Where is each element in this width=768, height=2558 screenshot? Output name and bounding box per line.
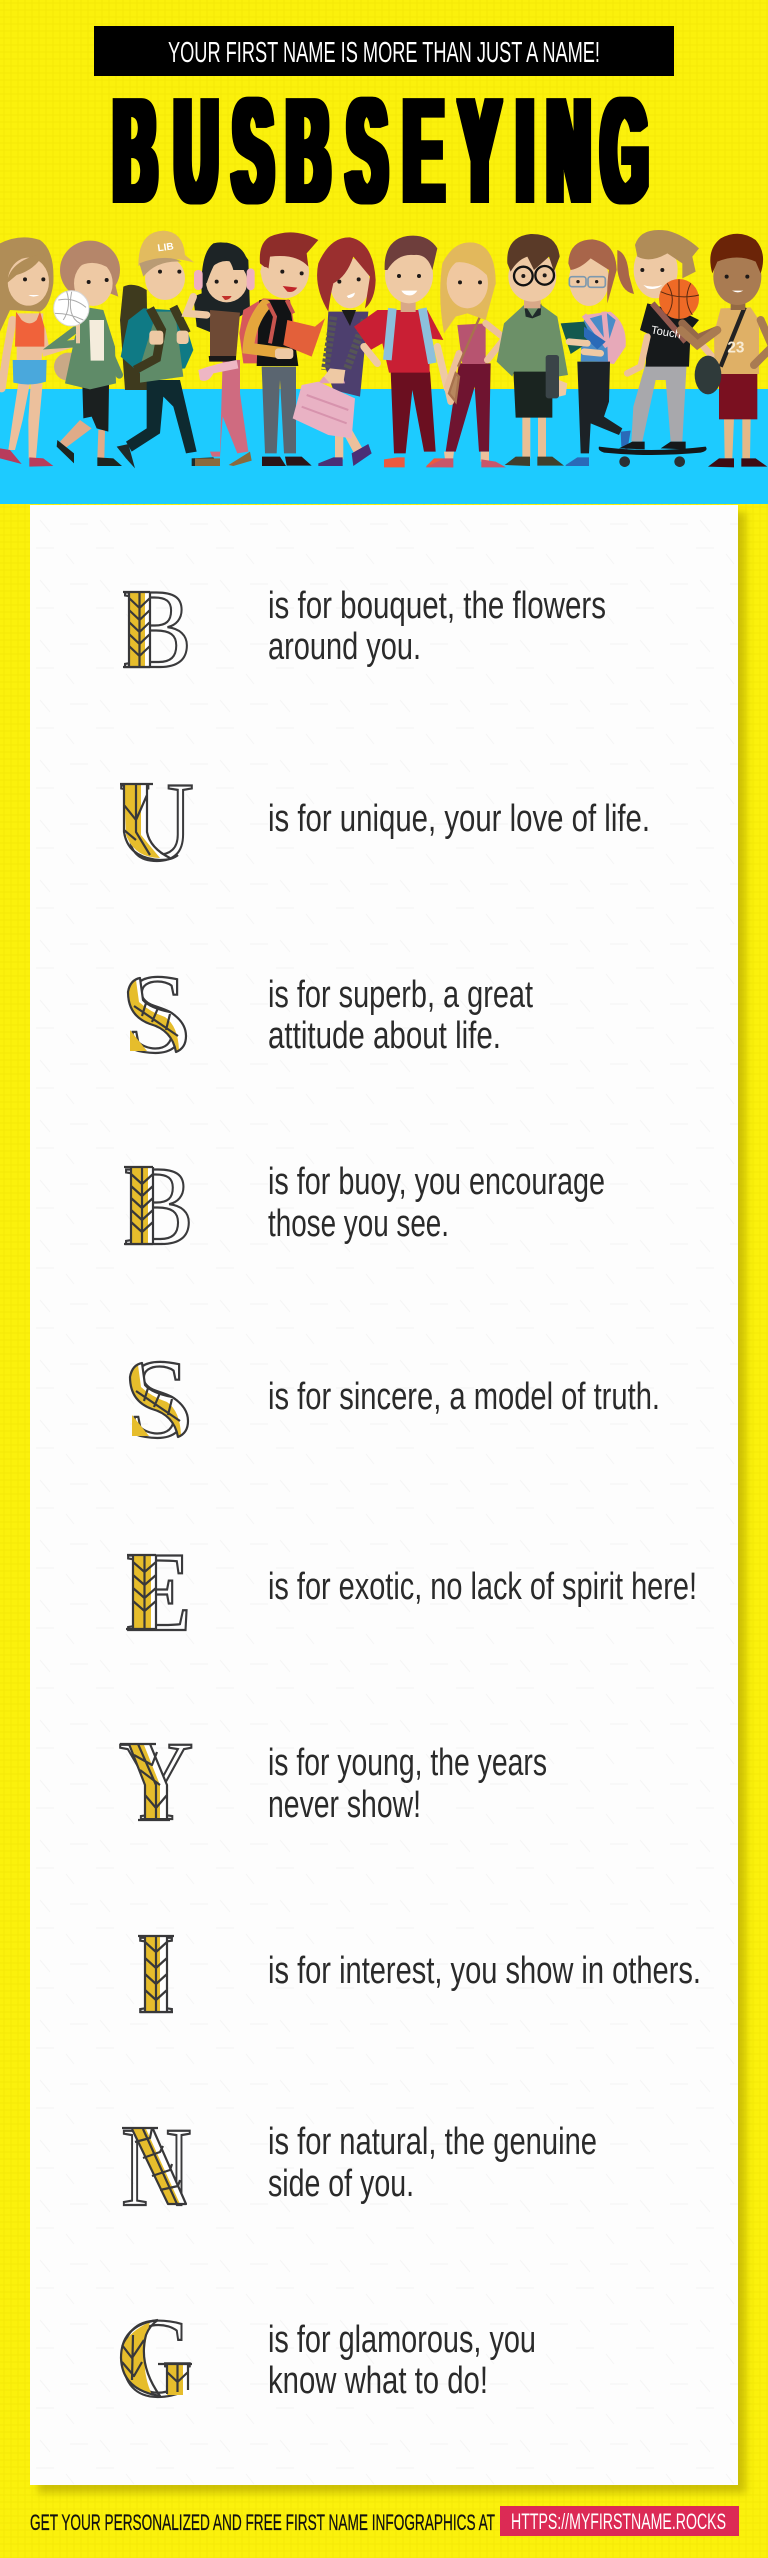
person: boy in yellow tank top: 23 — [727, 340, 744, 357]
text: Y meaning: never show! — [268, 1784, 421, 1826]
person: boy in red shirt — [354, 236, 453, 467]
person: girl in orange top — [0, 237, 78, 467]
illustrated letter G: G — [119, 2296, 193, 2421]
person: skater with basketball — [599, 230, 717, 467]
person: blonde girl — [426, 242, 506, 467]
row 1: letter B — [122, 567, 606, 692]
person: skater with basketball: Touch — [650, 324, 682, 341]
text: N meaning: side of you. — [268, 2163, 414, 2205]
row 5: letter S — [127, 1337, 660, 1462]
text: N meaning: is for natural, the genuine — [268, 2121, 597, 2163]
text: S meaning: is for superb, a great — [268, 974, 533, 1016]
illustrated letter Y: Y — [119, 1719, 194, 1844]
text: G meaning: is for glamorous, you — [268, 2319, 536, 2361]
group of people: left six — [0, 231, 376, 468]
person: boy in yellow tank top — [681, 234, 768, 467]
text: Y meaning: is for young, the years — [268, 1742, 547, 1784]
person: boy with glasses — [497, 234, 568, 466]
row 6: letter E — [125, 1530, 697, 1655]
text: B meaning: those you see. — [268, 1203, 449, 1245]
illustrated letter E: E — [125, 1530, 192, 1655]
person: boy with red book — [239, 232, 325, 466]
person: red-haired girl with pink bag — [293, 237, 376, 466]
row 3: letter S — [125, 952, 533, 1077]
text: B meaning: is for bouquet, the flowers — [268, 585, 606, 627]
person: girl with ponytail and tablet — [561, 239, 634, 466]
row 7: letter Y — [119, 1719, 547, 1844]
footer call to action: GET YOUR PERSONALIZED AND FREE FIRST NAME INFOGRAPHICS AT — [30, 2510, 495, 2535]
title: name: BUSBSEYING — [114, 68, 648, 233]
person: girl with headphones — [187, 242, 255, 466]
row 4: letter B — [123, 1144, 605, 1269]
text: G meaning: know what to do! — [268, 2360, 488, 2402]
text: U meaning: is for unique, your love of life. — [268, 798, 650, 840]
group of people: right six — [354, 230, 768, 467]
illustrated letter N: N — [121, 2105, 192, 2230]
illustrated letter S: S — [125, 952, 188, 1077]
illustrated letter B: B — [122, 567, 192, 692]
person: girl with volleyball — [54, 241, 122, 466]
floor band — [0, 389, 768, 504]
white panel shadow — [38, 512, 746, 2493]
illustrated letter B: B — [123, 1144, 194, 1269]
illustrated letter U: U — [119, 760, 194, 885]
text: B meaning: around you. — [268, 626, 421, 668]
person: hiker with backpack — [117, 231, 220, 468]
person: hiker with backpack: LIB — [157, 241, 174, 254]
row 10: letter G — [119, 2296, 536, 2421]
text: S meaning: is for sincere, a model of truth. — [268, 1376, 660, 1418]
white panel — [30, 505, 738, 2485]
row 2: letter U — [119, 760, 650, 885]
row 9: letter N — [121, 2105, 597, 2230]
text: S meaning: attitude about life. — [268, 1015, 501, 1057]
row 8: letter I — [136, 1912, 701, 2037]
header: tagline bar — [94, 26, 674, 76]
text: B meaning: is for buoy, you encourage — [268, 1161, 605, 1203]
illustrated letter S: S — [127, 1337, 190, 1462]
illustrated letter I: I — [136, 1912, 176, 2037]
